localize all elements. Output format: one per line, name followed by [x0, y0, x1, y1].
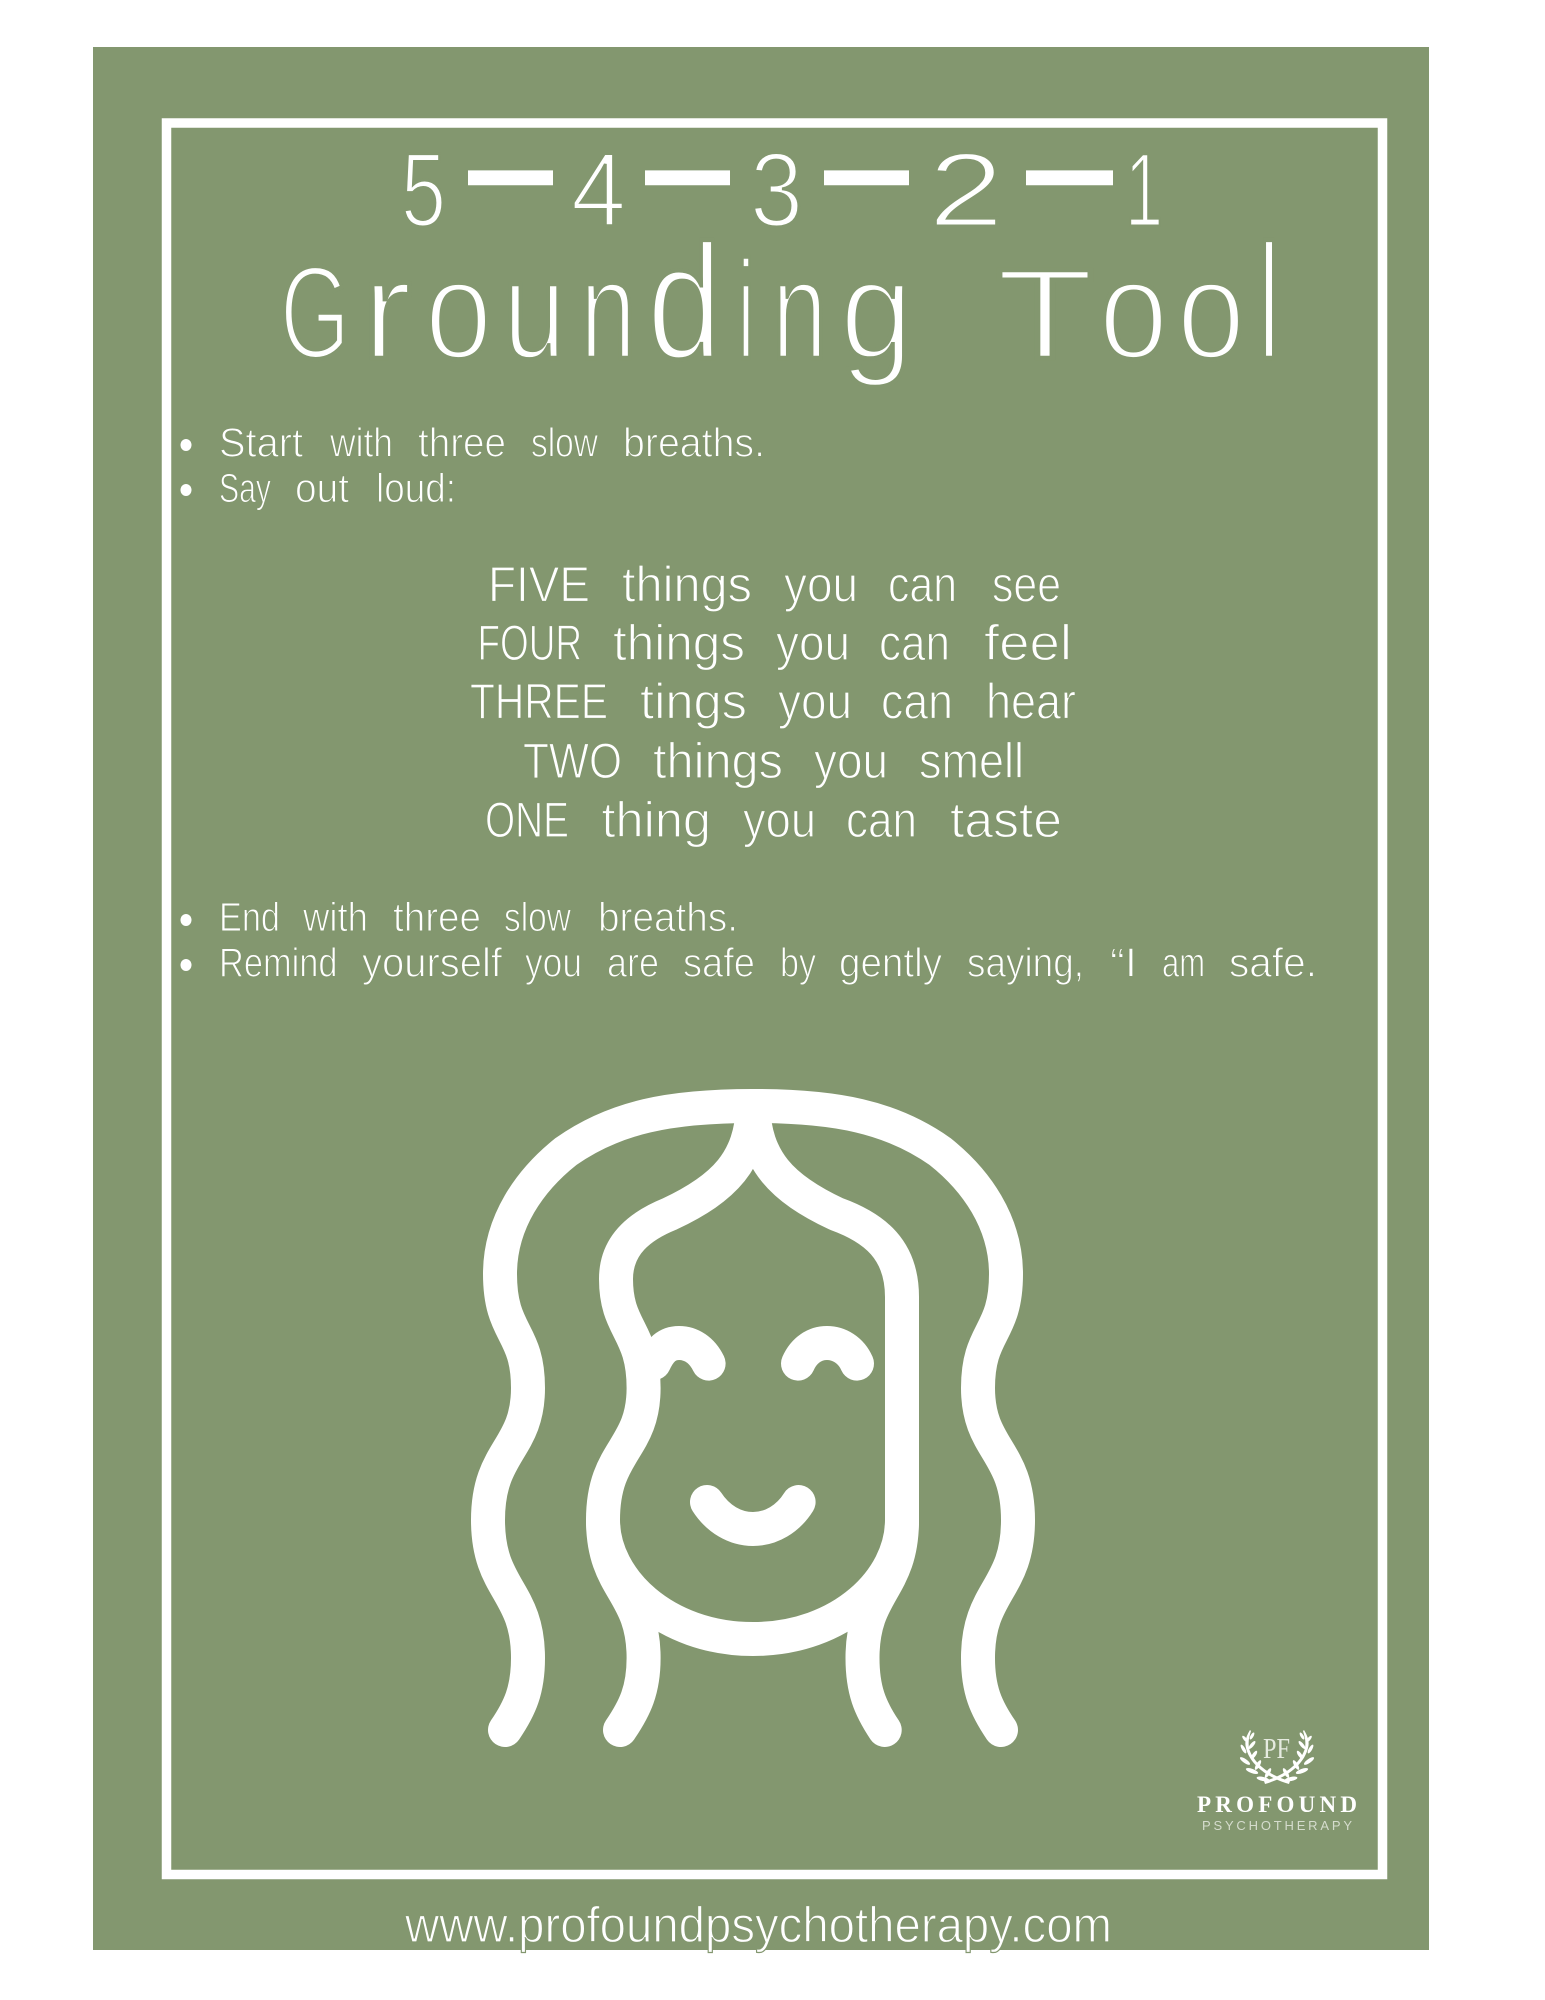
- instruction: say out loud: out: [295, 465, 350, 511]
- title: Grounding Tool: n: [580, 231, 636, 388]
- instruction: end with three slow breaths: End: [219, 894, 280, 940]
- logo subtitle: PSYCHOTHERAPY: [1202, 1818, 1352, 1833]
- instruction: end with three slow breaths: slow: [504, 894, 571, 940]
- title: Grounding Tool: r: [362, 231, 412, 388]
- icon: smiling face with wavy hair: [488, 1106, 1018, 1730]
- four things: FOUR: [478, 615, 582, 671]
- instruction: start with three slow breaths: with: [329, 420, 393, 466]
- title: Grounding Tool: G: [280, 239, 350, 386]
- instruction: remind yourself you are safe: “I: [1110, 940, 1137, 986]
- logo monogram: PF: [1263, 1733, 1290, 1765]
- centered five senses list: [470, 557, 1076, 848]
- instruction: start with three slow breaths: three: [418, 420, 506, 466]
- two things: things: [653, 733, 783, 789]
- five things: FIVE: [488, 557, 590, 613]
- title: Grounding Tool: o: [1177, 231, 1245, 388]
- right eye: [798, 1343, 857, 1364]
- two things: you: [814, 733, 888, 789]
- five things: see: [992, 557, 1061, 613]
- title: Grounding Tool: i: [737, 231, 755, 388]
- four things: can: [879, 615, 950, 671]
- bullet 1: [180, 439, 192, 451]
- bullet 2: [180, 484, 192, 496]
- instruction: remind yourself you are safe: saying,: [967, 940, 1084, 986]
- inner hair left: [603, 1106, 753, 1730]
- four things: you: [776, 615, 850, 671]
- four things: feel: [984, 615, 1072, 671]
- title: Grounding Tool: u: [503, 231, 566, 388]
- instruction: end with three slow breaths: three: [393, 894, 481, 940]
- one thing: you: [743, 792, 816, 848]
- instruction: start with three slow breaths: slow: [531, 420, 598, 466]
- one thing: ONE: [485, 792, 569, 848]
- inner hair right and face side: [753, 1106, 902, 1730]
- one thing: can: [846, 792, 917, 848]
- one thing: thing: [602, 792, 711, 848]
- title: 5-4-3-2-1: —: [824, 82, 909, 250]
- title: 5-4-3-2-1: —: [468, 82, 553, 250]
- title: 5-4-3-2-1: —: [645, 82, 730, 250]
- title: Grounding Tool: n: [772, 231, 827, 388]
- instruction: remind yourself you are safe: safe: [683, 940, 755, 986]
- instruction: remind yourself you are safe: yourself: [362, 940, 503, 986]
- instruction: say out loud: Say: [219, 465, 271, 511]
- outer hair: [488, 1106, 1018, 1730]
- title: Grounding Tool: d: [647, 210, 722, 393]
- two things: smell: [919, 733, 1024, 789]
- three tings: hear: [986, 674, 1076, 730]
- three tings: tings: [640, 674, 747, 730]
- instruction: start with three slow breaths: breaths.: [623, 420, 765, 466]
- intro bullets: [180, 420, 765, 511]
- four things: things: [613, 615, 745, 671]
- logo: Profound Psychotherapy: [1197, 1730, 1357, 1833]
- instruction: start with three slow breaths: Start: [219, 420, 304, 466]
- bullet 3: [180, 914, 192, 926]
- title: 5-4-3-2-1: —: [1026, 82, 1113, 250]
- instruction: remind yourself you are safe: gently: [839, 940, 942, 986]
- three tings: can: [881, 674, 953, 730]
- white border frame: [166, 123, 1382, 1874]
- title: Grounding Tool: o: [1099, 231, 1168, 388]
- title: Grounding Tool: o: [425, 231, 492, 388]
- instruction: remind yourself you are safe: safe.: [1229, 940, 1317, 986]
- title: Grounding Tool: l: [1258, 210, 1280, 393]
- five things: things: [622, 557, 752, 613]
- logo wordmark: PROFOUND: [1197, 1792, 1357, 1817]
- instruction: end with three slow breaths: with: [302, 894, 368, 940]
- bullet 4: [180, 959, 192, 971]
- three tings: you: [778, 674, 852, 730]
- instruction: say out loud: loud:: [376, 465, 456, 511]
- left eye: [654, 1343, 709, 1364]
- title: 5-4-3-2-1: 2: [928, 132, 1004, 249]
- title: 5-4-3-2-1: [401, 82, 1163, 250]
- instruction: remind yourself you are safe: by: [780, 940, 816, 986]
- three tings: THREE: [470, 674, 608, 730]
- five things: can: [888, 557, 957, 613]
- website url: www.profoundpsychotherapy.com: [404, 1897, 1112, 1953]
- jawline: [603, 1520, 902, 1639]
- instruction: remind yourself you are safe: am: [1162, 940, 1205, 986]
- instruction: remind yourself you are safe: you: [525, 940, 582, 986]
- instruction: remind yourself you are safe: Remind: [219, 940, 338, 986]
- title: 5-4-3-2-1: 1: [1125, 132, 1163, 249]
- instruction: remind yourself you are safe: are: [607, 940, 659, 986]
- title: 5-4-3-2-1: 4: [571, 132, 626, 249]
- closing bullets: [180, 894, 1317, 986]
- title: Grounding Tool: g: [840, 231, 913, 388]
- instruction: end with three slow breaths: breaths.: [598, 894, 738, 940]
- two things: TWO: [523, 733, 622, 789]
- title: 5-4-3-2-1: 3: [750, 132, 803, 249]
- five things: you: [784, 557, 858, 613]
- smile: [707, 1502, 799, 1529]
- title: Grounding Tool: T: [996, 243, 1094, 386]
- laurel wreath: [1239, 1730, 1315, 1784]
- title: 5-4-3-2-1: 5: [401, 132, 446, 249]
- one thing: taste: [950, 792, 1062, 848]
